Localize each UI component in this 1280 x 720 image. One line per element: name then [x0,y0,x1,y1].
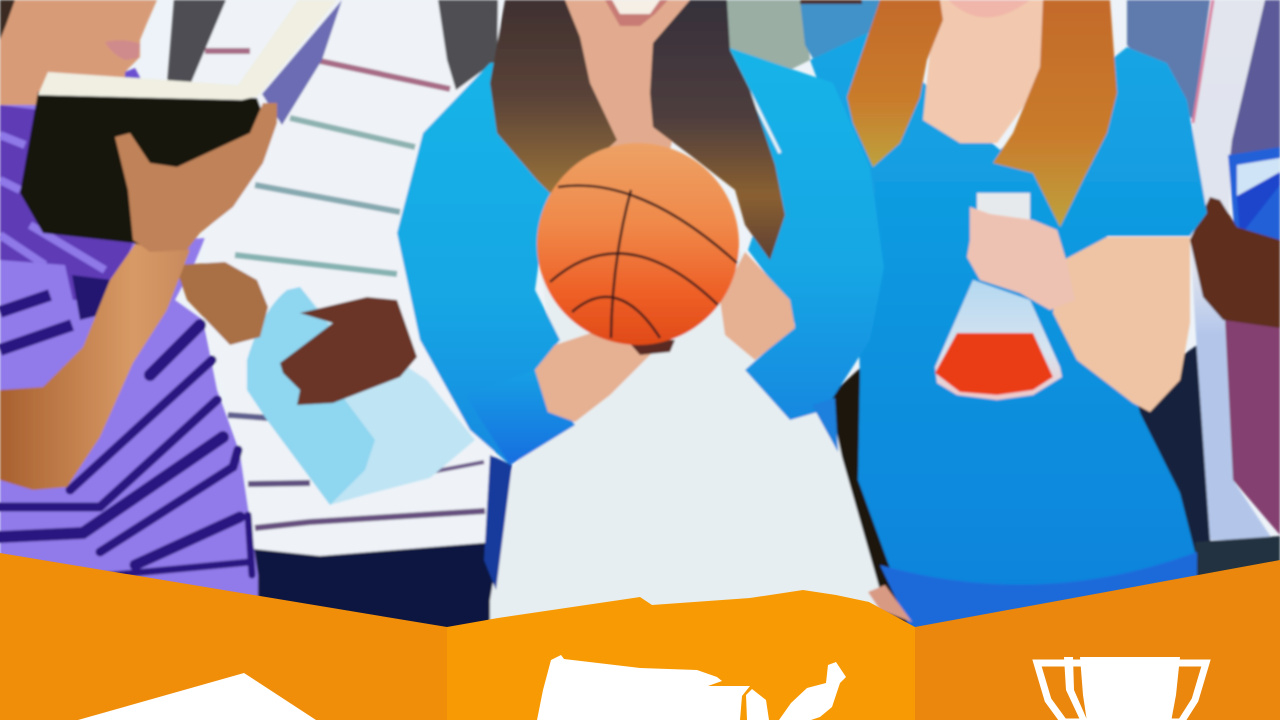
blue book [1228,147,1280,240]
hair right [993,0,1117,227]
hand [115,103,277,252]
string [727,47,780,153]
dark jacket [1120,345,1212,565]
hoodie left [397,60,600,465]
orange panel: centre [447,590,915,720]
basketball [537,143,739,345]
face and chest [560,0,700,150]
hair left [847,0,943,167]
dark hand [280,297,417,405]
hoodie right [700,47,884,420]
jeans [254,542,500,670]
checked shirt [1127,0,1210,120]
book pages [38,0,337,100]
hair right [650,0,785,260]
shirt [0,105,258,610]
shirt [810,33,1207,660]
arm left [535,330,655,422]
plaid shirt right [1230,0,1280,158]
white tee [1190,0,1273,540]
book cover [262,0,342,125]
student in striped shirt [167,0,500,670]
arm [0,240,190,490]
arm [1053,237,1190,412]
person behind centre [725,0,885,70]
flask [935,193,1062,400]
hair left [490,0,617,193]
hand at hip [868,585,912,622]
student with book [0,0,342,610]
tee [490,200,880,640]
backpack strap left [167,0,226,85]
face [0,0,157,115]
hem [880,552,1197,660]
icon: map of USA [537,655,846,720]
hand [967,207,1075,310]
dark hand [1190,197,1280,328]
dark gap between students [825,350,925,640]
blue cloth [247,287,475,505]
icon: trophy [1037,657,1206,720]
neck [923,0,1050,143]
sleeve [0,260,85,392]
icon: graduation cap [78,673,316,720]
student with basketball [397,0,912,640]
other arm [175,262,268,345]
student at far right [1120,0,1280,600]
student with flask [810,0,1207,660]
backpack strap right [438,0,498,90]
orange panel: left [0,553,447,720]
orange panel: right [915,560,1280,720]
fingers [625,338,675,355]
arm right [720,252,795,360]
book [20,92,265,250]
